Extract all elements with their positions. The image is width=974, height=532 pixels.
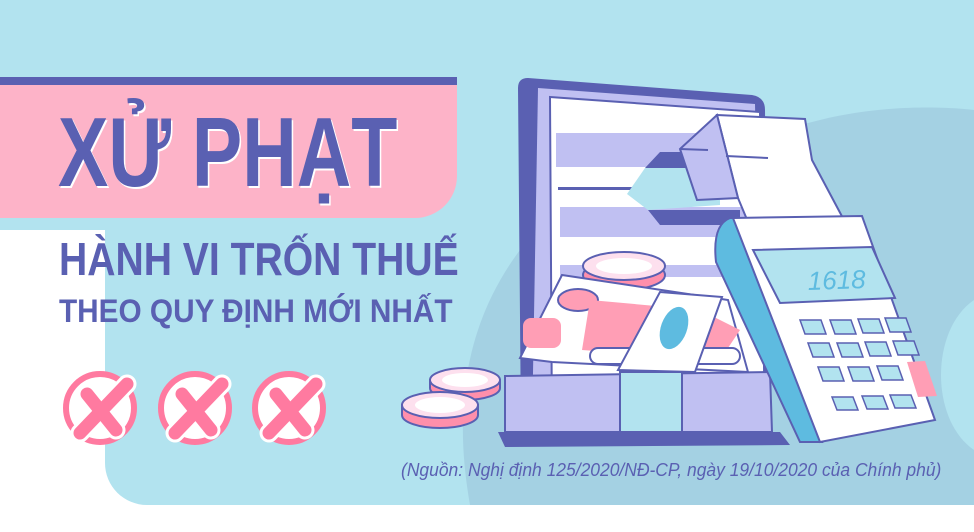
coins left	[402, 368, 500, 428]
pink banner	[0, 77, 457, 218]
icon: x 2	[161, 374, 229, 442]
bill	[520, 275, 748, 372]
background top	[0, 0, 974, 230]
subtitle line 2: THEO QUY ĐỊNH MỚI NHẤT	[59, 293, 453, 329]
money stack	[498, 252, 790, 447]
icon: x 1	[66, 374, 134, 442]
subtitle line 1: HÀNH VI TRỐN THUẾ	[59, 233, 459, 285]
strap bill	[618, 292, 722, 372]
coin on stack	[583, 260, 665, 290]
icon: x 3	[255, 374, 323, 442]
source note: (Nguồn: Nghị định 125/2020/NĐ-CP, ngày 19/10/2020 của Chính phủ)	[401, 460, 941, 480]
calculator	[715, 216, 937, 442]
x icons	[63, 371, 326, 445]
receipt paper	[680, 115, 845, 222]
calculator: 1618	[807, 264, 867, 296]
monitor	[518, 78, 768, 432]
title: XỬ PHẠT	[58, 97, 397, 207]
background blob	[463, 108, 974, 505]
background panel	[105, 100, 974, 505]
